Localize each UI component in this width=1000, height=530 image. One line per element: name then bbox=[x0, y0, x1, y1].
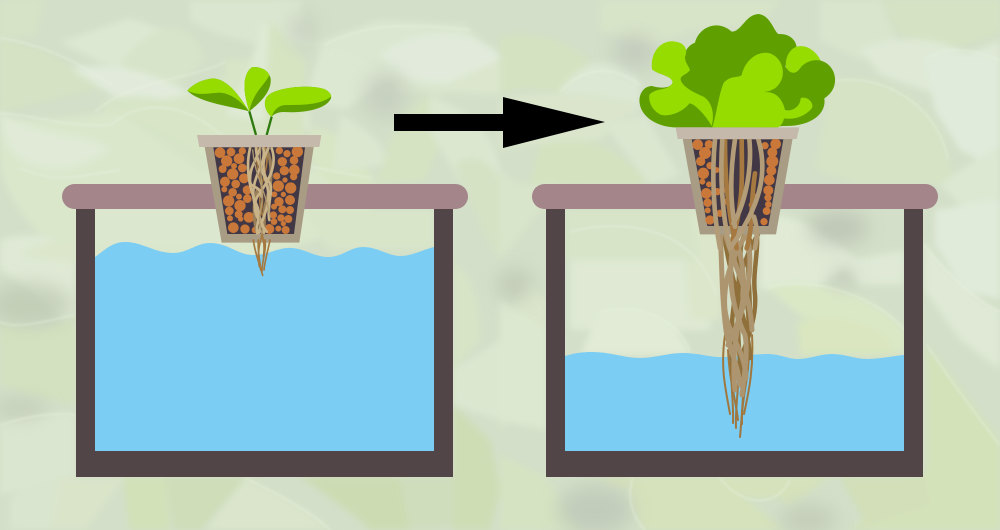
net pot body bbox=[204, 145, 314, 243]
seedling leaves bbox=[187, 67, 331, 117]
tank walls bbox=[76, 200, 453, 477]
seedling stems bbox=[249, 111, 272, 135]
net pot body bbox=[683, 138, 793, 234]
pot interior bbox=[213, 147, 305, 234]
clay pebbles bbox=[693, 139, 781, 225]
water: low level bbox=[565, 352, 904, 452]
roots inside the pot bbox=[713, 139, 762, 248]
right tank bbox=[532, 184, 938, 477]
tank lid bbox=[62, 184, 468, 209]
pot rim bbox=[197, 135, 321, 147]
mature lettuce in net pot bbox=[639, 14, 835, 437]
tank walls bbox=[546, 200, 923, 477]
long roots below the pot bbox=[720, 225, 758, 437]
pot rim bbox=[676, 127, 799, 139]
pot interior bbox=[692, 139, 783, 226]
arrow bbox=[394, 97, 605, 148]
tank lid bbox=[532, 184, 938, 209]
left tank bbox=[62, 184, 468, 477]
seedling in net pot bbox=[187, 67, 331, 275]
pot and leaves detail bbox=[639, 14, 835, 248]
lettuce leaves bbox=[639, 14, 835, 127]
clay pebbles bbox=[215, 146, 303, 234]
water: high level bbox=[95, 242, 434, 452]
short roots bbox=[248, 147, 274, 275]
